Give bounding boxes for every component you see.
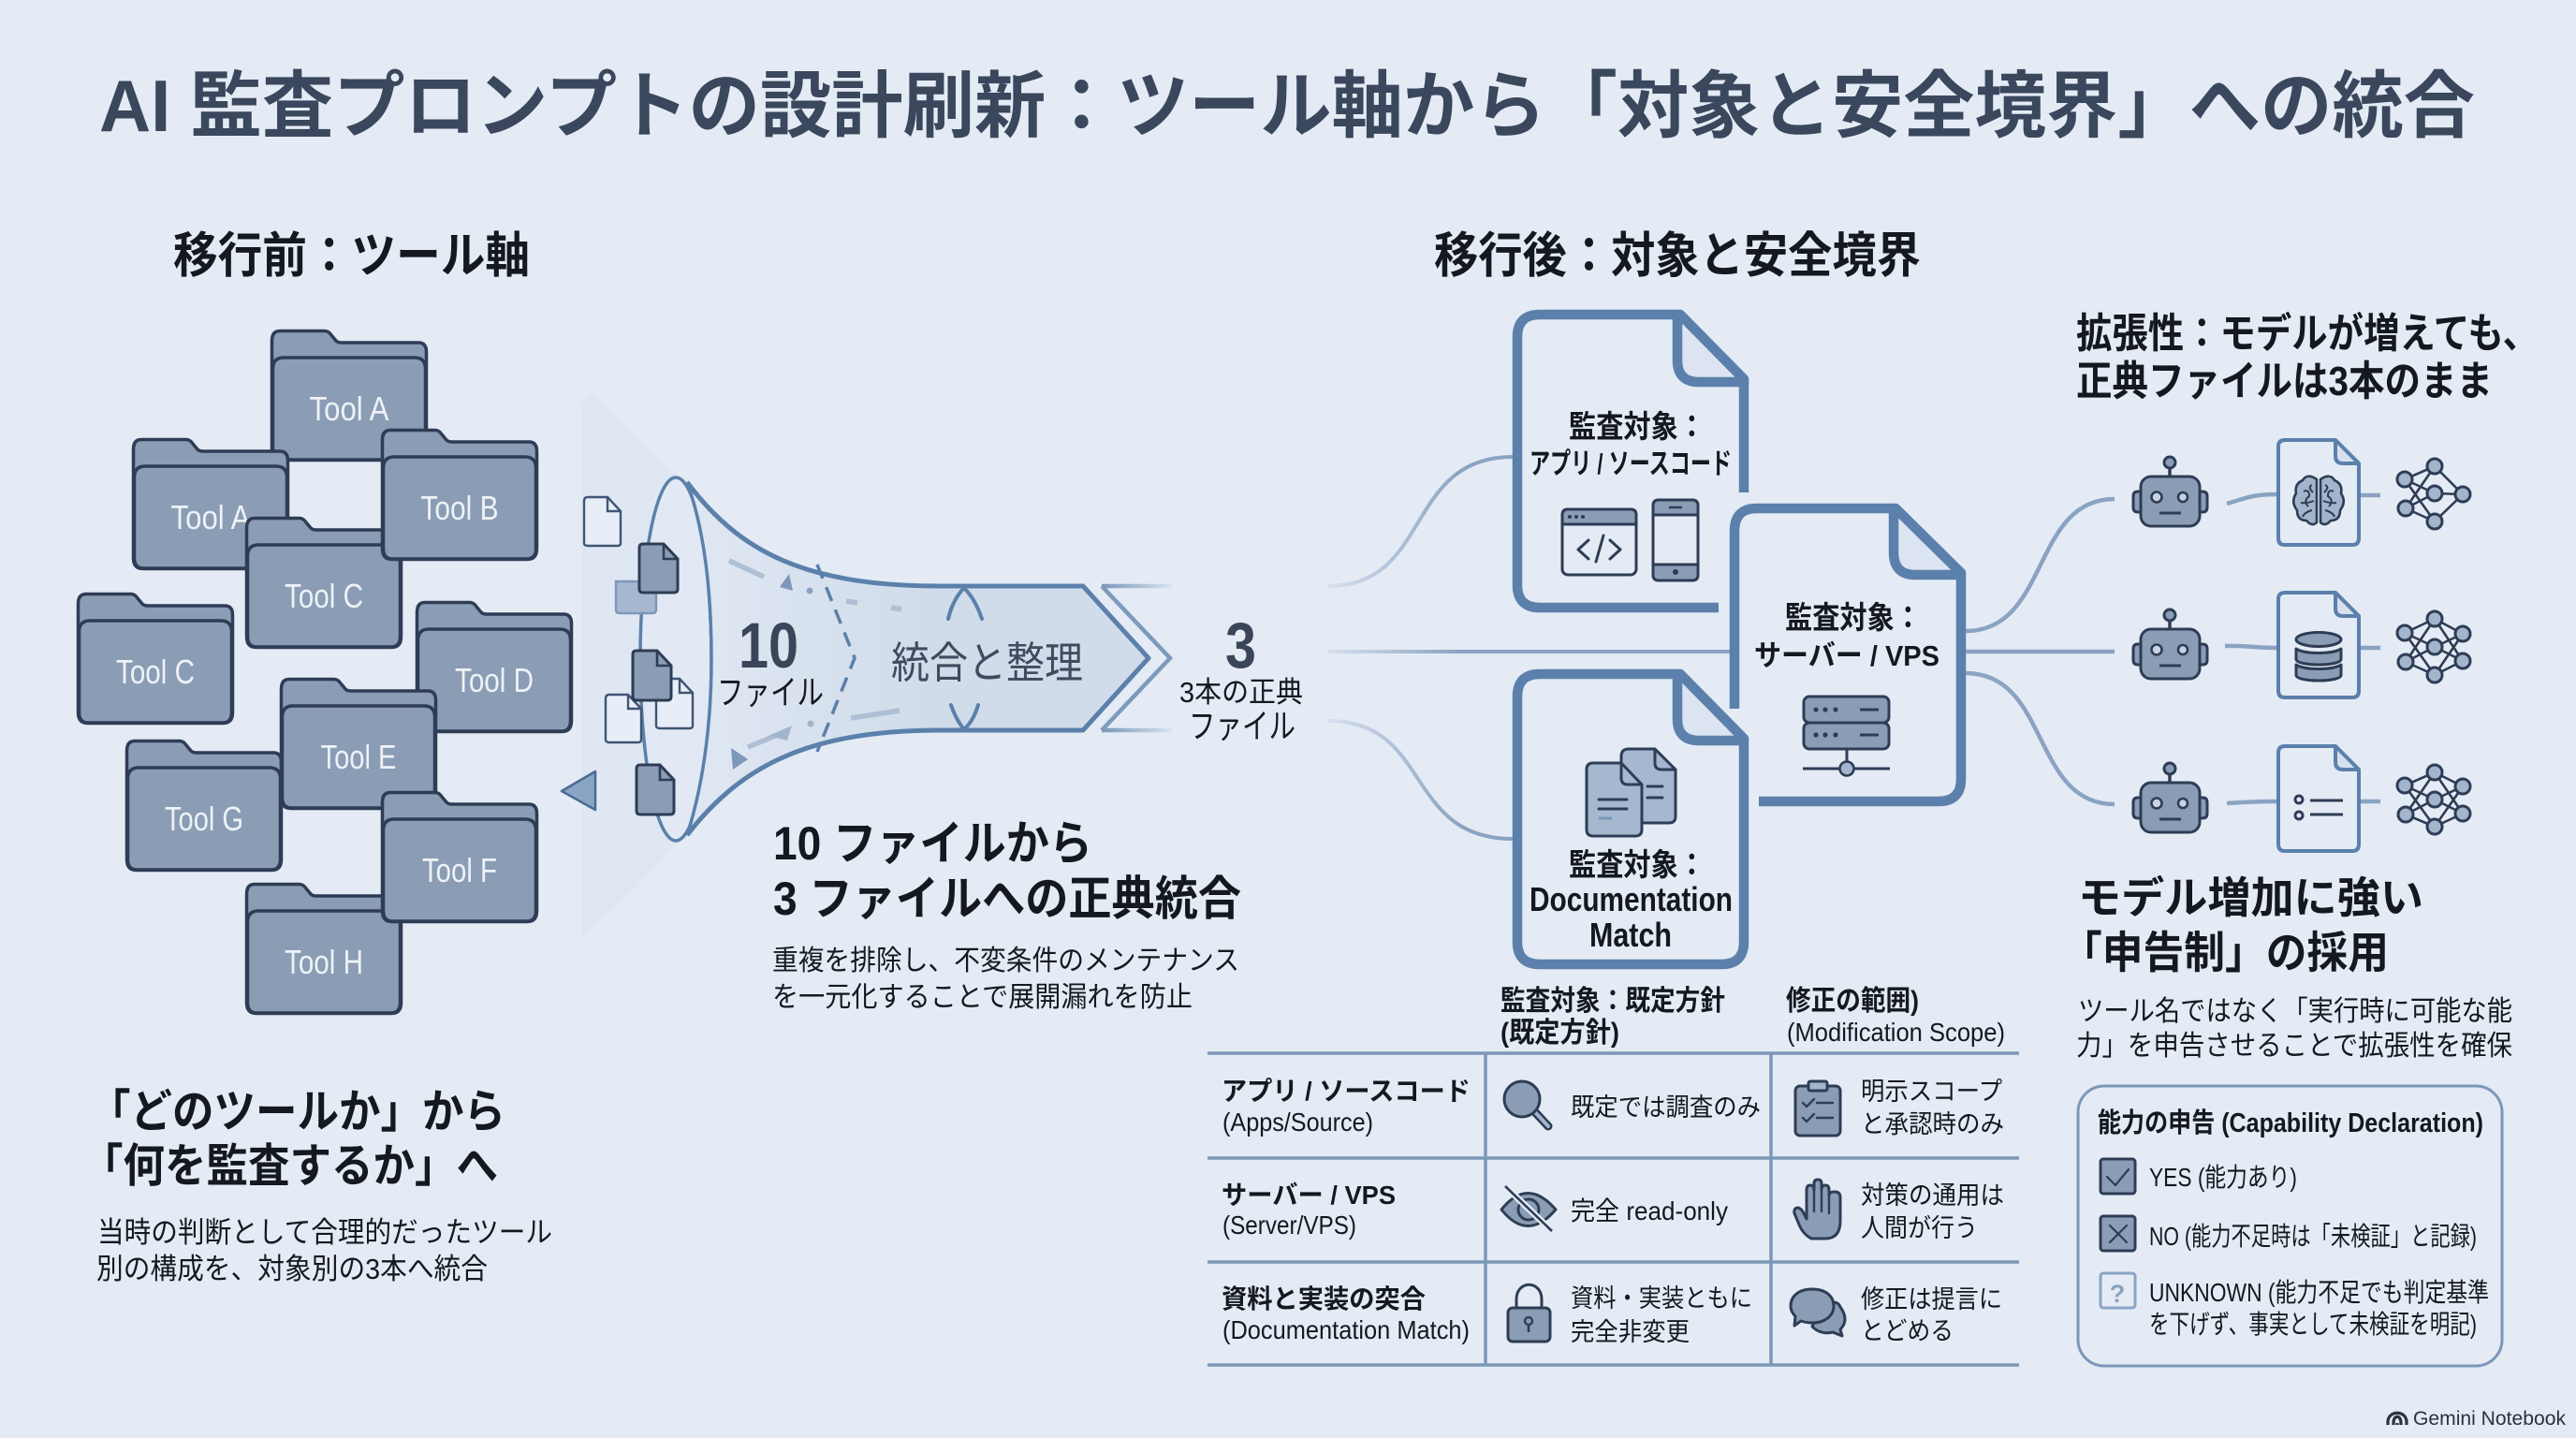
line 2: 正典ファイルは3本のまま <box>2076 359 2493 404</box>
folder: Tool G <box>127 741 281 871</box>
item: unknown: を下げず、事実として未検証を明記) <box>2149 1310 2477 1339</box>
connector robot to doc <box>2227 494 2278 504</box>
heading: after migration: 移行後：対象と安全境界 <box>1434 229 1921 284</box>
row: server/VPS <box>1222 1180 2004 1242</box>
panel frame <box>2078 1086 2502 1366</box>
column header: default policy <box>1500 986 1725 1049</box>
row sublabel: (Server/VPS) <box>1222 1211 1356 1240</box>
column header: modification scope: (Modification Scope) <box>1787 1018 2005 1047</box>
scope text: 明示スコープ <box>1861 1078 2002 1106</box>
doc fold <box>1677 674 1744 741</box>
funnel mouth <box>640 477 711 841</box>
doc fold <box>1894 508 1961 575</box>
dark file middle <box>633 651 671 700</box>
heading line 2: 「何を監査するか」へ <box>81 1141 498 1192</box>
number 10: 10 <box>739 609 798 682</box>
text block: 10 to 3 consolidation <box>772 817 1241 1013</box>
icon: code window <box>1562 509 1636 575</box>
item: unknown: UNKNOWN (能力不足でも判定基準 <box>2149 1278 2489 1307</box>
watermark: Gemini Notebook <box>2388 1408 2566 1430</box>
description line 1: 当時の判断として合理的だったツール <box>97 1216 552 1249</box>
funnel: 10 files to 3 files <box>562 395 1172 940</box>
folder: Tool G: Tool G <box>165 800 243 838</box>
panel title: 能力の申告 (Capability Declaration) <box>2098 1108 2483 1138</box>
label file: ファイル <box>1189 707 1295 745</box>
scope text: とどめる <box>1861 1317 1954 1345</box>
panel: capability declaration <box>2078 1086 2502 1366</box>
row: apps/source <box>1222 1077 2004 1138</box>
row sublabel: (Apps/Source) <box>1222 1108 1373 1137</box>
folder: Tool D <box>417 603 571 732</box>
icon: robot <box>2133 763 2207 832</box>
row sublabel: (Documentation Match) <box>1222 1315 1470 1344</box>
column header: default policy: (既定方針) <box>1500 1018 1619 1049</box>
heading line 1: 「どのツールか」から <box>89 1087 505 1137</box>
icon: clipboard <box>1795 1081 1840 1136</box>
icon: phone <box>1653 500 1698 580</box>
logo <box>2388 1413 2407 1425</box>
doc title: 監査対象： <box>1569 847 1705 882</box>
policy text: 既定では調査のみ <box>1571 1093 1761 1122</box>
policy text: 完全非変更 <box>1571 1318 1690 1346</box>
item: yes <box>2100 1159 2297 1194</box>
folder: Tool C middle <box>247 519 401 648</box>
icon: stacked documents <box>1587 749 1676 836</box>
scope text <box>1861 1285 2002 1345</box>
outline file left <box>606 695 641 742</box>
title: AI 監査プロンプトの設計刷新：ツール軸から「対象と安全境界」への統合 <box>99 65 2475 147</box>
flow marks <box>729 561 901 770</box>
folder: Tool H: Tool H <box>285 943 363 981</box>
label canonical: 3本の正典 <box>1179 676 1303 709</box>
connector robot to doc <box>2225 646 2278 648</box>
heading line 1: 10 ファイルから <box>773 817 1092 870</box>
scope text <box>1861 1181 2004 1242</box>
table: audit target policy <box>1208 986 2019 1365</box>
panel: target doc documentation match <box>1517 674 1744 964</box>
folder: Tool B: Tool B <box>421 489 498 527</box>
doc label: アプリ / ソースコード <box>1530 448 1732 480</box>
outer chevron <box>1102 586 1172 730</box>
policy text <box>1571 1284 1752 1346</box>
folder: Tool A left <box>133 440 288 569</box>
doc with list <box>2278 746 2359 851</box>
connector doc to network <box>2361 646 2380 650</box>
scope text <box>1861 1078 2004 1138</box>
number 3: 3 <box>1225 609 1256 682</box>
icon: neural network full <box>2397 611 2470 682</box>
folder: Tool F: Tool F <box>422 851 497 889</box>
doc title: 監査対象： <box>1785 600 1922 635</box>
doc label line 2: Match <box>1589 916 1672 954</box>
dashed stage divider <box>817 565 855 752</box>
inflow triangle arrow <box>562 771 595 810</box>
connector doc to network <box>2361 800 2380 803</box>
label: Gemini Notebook <box>2413 1408 2566 1430</box>
heading line 2: 3 ファイルへの正典統合 <box>773 873 1241 925</box>
item: unknown <box>2100 1273 2489 1339</box>
description line 2: を一元化することで展開漏れを防止 <box>772 982 1193 1013</box>
dark file bottom <box>637 765 674 814</box>
pinch marks <box>948 588 982 729</box>
icon: crossed eye <box>1501 1186 1556 1231</box>
column header: default policy: 監査対象：既定方針 <box>1500 986 1725 1017</box>
scope text: と承認時のみ <box>1861 1110 2004 1138</box>
doc with database <box>2278 593 2359 697</box>
doc title: 監査対象： <box>1569 409 1705 444</box>
table grid <box>1208 1053 2019 1365</box>
icon: robot <box>2133 609 2207 679</box>
icon: neural network full <box>2397 765 2470 834</box>
panel: model row 1 <box>2133 440 2470 545</box>
description line 1: ツール名ではなく「実行時に可能な能 <box>2078 996 2512 1027</box>
item: yes: YES (能力あり) <box>2149 1163 2297 1192</box>
doc label line 1: Documentation <box>1530 880 1733 918</box>
column header: modification scope <box>1786 986 2005 1047</box>
scope text: 対策の通用は <box>1861 1181 2004 1210</box>
item: no: NO (能力不足時は「未検証」と記録) <box>2149 1222 2477 1251</box>
funnel back haze <box>581 395 688 940</box>
result: 3 canonical files <box>1179 609 1303 745</box>
row: documentation match <box>1222 1284 2002 1346</box>
panel: model row 2 <box>2133 593 2470 697</box>
folder: Tool B <box>382 431 537 560</box>
icon: lock <box>1508 1284 1550 1342</box>
heading: extensibility <box>2076 311 2539 404</box>
funnel body fill <box>687 482 1149 835</box>
row label: 資料と実装の突合 <box>1222 1284 1426 1313</box>
folder: Tool A left: Tool A <box>170 498 251 536</box>
scope text: 人間が行う <box>1861 1214 1978 1242</box>
item: no <box>2100 1216 2477 1251</box>
text block: declaration system <box>2061 873 2512 1062</box>
folder: Tool C left <box>79 594 232 723</box>
panel: target doc app/source <box>1517 315 1744 608</box>
description line 2: 力」を申告させることで拡張性を確保 <box>2076 1031 2512 1062</box>
policy text: 完全 read-only <box>1571 1196 1728 1225</box>
folder: Tool E: Tool E <box>320 738 397 776</box>
outline file top <box>584 497 621 546</box>
folder: Tool E <box>281 680 436 809</box>
folder: Tool H <box>247 884 401 1013</box>
connector robot to doc <box>2227 801 2278 803</box>
folder: Tool C left: Tool C <box>116 653 195 691</box>
folder: Tool F <box>382 792 537 921</box>
column header: modification scope: 修正の範囲) <box>1786 986 1919 1017</box>
label files: ファイル <box>717 673 824 712</box>
item: unknown: ? <box>2110 1280 2125 1308</box>
folder: Tool C middle: Tool C <box>285 577 363 615</box>
outline file right <box>656 679 693 728</box>
description line 1: 重複を排除し、不変条件のメンテナンス <box>772 946 1239 976</box>
small files entering funnel <box>584 497 693 814</box>
connector doc to network <box>2361 493 2380 497</box>
folder: Tool A top: Tool A <box>309 389 389 428</box>
doc with brain <box>2278 440 2359 545</box>
doc fill <box>1734 508 1961 801</box>
doc label: サーバー / VPS <box>1754 639 1939 672</box>
dark file top <box>639 544 678 593</box>
doc fold <box>1677 315 1744 382</box>
icon: speech bubbles <box>1791 1289 1845 1336</box>
connectors into target docs <box>1328 457 1732 839</box>
connectors to model rows <box>1966 499 2115 804</box>
heading: before migration: 移行前：ツール軸 <box>173 229 530 284</box>
heading line 1: モデル増加に強い <box>2078 873 2423 922</box>
icon: database <box>2296 633 2341 681</box>
text block: which tool to what to audit <box>81 1087 552 1285</box>
doc outline <box>1517 315 1744 608</box>
panel: target doc server/VPS <box>1734 508 1961 801</box>
icon: raised hand <box>1794 1180 1840 1239</box>
folder: Tool D: Tool D <box>455 661 534 699</box>
label consolidate: 統合と整理 <box>891 638 1083 687</box>
icon: neural network small <box>2397 459 2470 529</box>
panel: model row 3 <box>2133 746 2470 851</box>
funnel inner rim <box>687 482 711 835</box>
icon: brain <box>2293 477 2344 524</box>
icon: robot <box>2133 457 2207 526</box>
translucent file <box>616 581 656 613</box>
description line 2: 別の構成を、対象別の3本へ統合 <box>96 1253 488 1285</box>
row label: サーバー / VPS <box>1222 1181 1396 1210</box>
icon: list <box>2295 796 2343 819</box>
heading line 2: 「申告制」の採用 <box>2061 928 2389 977</box>
icon: magnifier <box>1504 1081 1548 1126</box>
panel: scattered tool folders <box>79 331 571 1013</box>
doc outline <box>1734 508 1961 801</box>
icon: server rack <box>1803 697 1890 775</box>
row label: アプリ / ソースコード <box>1222 1077 1471 1106</box>
folder: Tool A top <box>271 331 427 461</box>
funnel body outline <box>687 482 1149 835</box>
doc body <box>1517 674 1744 964</box>
policy text: 資料・実装ともに <box>1571 1284 1752 1313</box>
scope text: 修正は提言に <box>1861 1285 2002 1313</box>
